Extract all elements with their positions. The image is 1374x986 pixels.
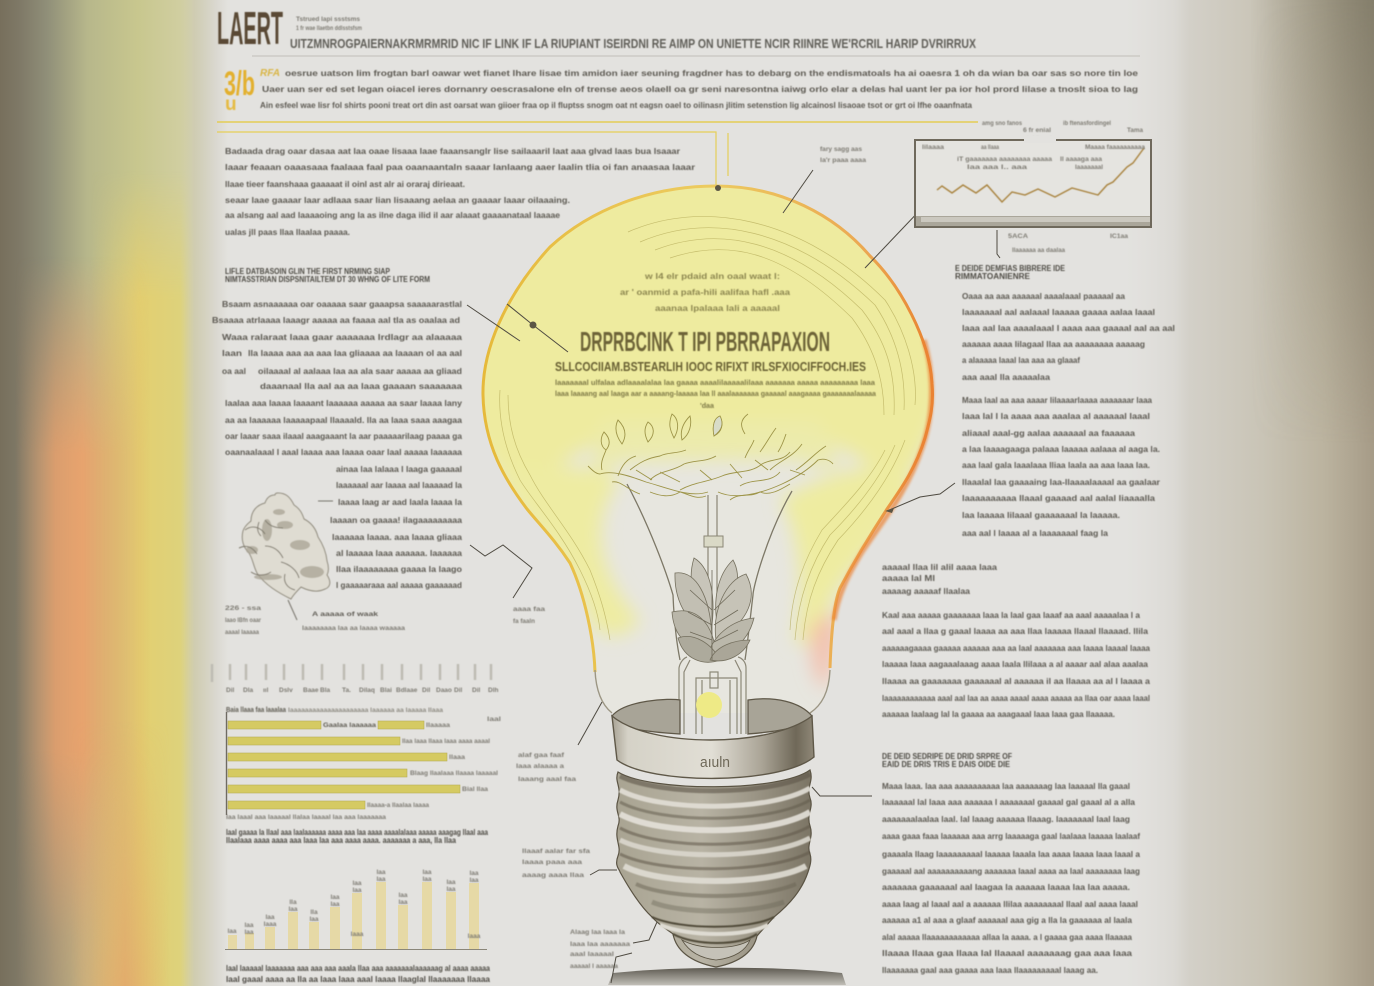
column labels: laa	[398, 899, 408, 906]
right heading 4: EAID DE DRIS TRIS E DAIS OIDE DIE	[882, 760, 1011, 769]
column labels: laa	[352, 880, 362, 887]
inner glass funnel	[627, 484, 792, 660]
panel: right column block 2: laaa lal l la aaaa aaa aaalaa al aaaaaal laaal	[962, 412, 1150, 421]
bar labels: laal	[487, 716, 501, 723]
glass outline	[483, 186, 933, 672]
arrow: chart tick	[997, 230, 1000, 258]
intro block with yellow numeral	[224, 65, 1139, 115]
panel: right column block 2: laa laaaaa lilaaal gaaaaaaal la laaaaa.	[962, 511, 1120, 520]
tick strip chart: Dil	[454, 687, 462, 694]
chart labels: ll aaaaga aaa	[1060, 156, 1102, 163]
yellow numeral: u	[225, 94, 237, 115]
column labels: lla	[289, 899, 297, 906]
bar labels: llaaaaa	[426, 722, 450, 729]
intro block with yellow numeral: Uaer uan ser ed set legan oiacel ieres dornanry oescrasalone eln of trense aeos olaell oa gr seni naresontna iaiwg orlo elar a delas hal uant ler pa ior hol prord lilase a tnoslt sioa to lag	[262, 85, 1138, 94]
panel: right column block 4	[882, 752, 1141, 975]
chart labels: llaaaaaa aa daalaa	[1012, 247, 1065, 254]
column labels	[227, 869, 481, 940]
panel: left column heading	[225, 267, 430, 284]
panel: right column block 2: llaaalal laa gaaaaing laa-llaaaalaaaal aa gaalaar	[962, 478, 1160, 487]
yellow rule	[217, 121, 978, 123]
column labels: laa	[244, 922, 254, 929]
chart axis band	[916, 216, 1150, 226]
right text 4: gaaaaal aal aaaaaaaaaang aaaaaaa laaal aaaa aa laal aaaaaaaa laag	[882, 867, 1140, 876]
panel: top left text: ualas jll paas llaa llaalaa paaaa.	[225, 228, 350, 237]
tick strip chart: Dlh	[488, 687, 498, 694]
column labels: laa	[352, 887, 362, 894]
column labels: laa	[330, 894, 340, 901]
collar mark: aıuln	[700, 754, 730, 771]
tick strip chart: Dil	[472, 687, 480, 694]
panel: left column text wrapping the bulb: oar laaar saaa ilaaal aaagaaant la aar paaaaarilaag paaaa ga	[225, 432, 463, 441]
chart labels: aa llaaa	[981, 144, 999, 151]
filament support frame	[679, 657, 746, 734]
right text 3	[882, 611, 1151, 719]
chart labels: Maaaa faaaaaaaaaa	[1085, 144, 1145, 151]
tick strip chart: ııl	[263, 687, 269, 694]
stem	[708, 495, 717, 600]
panel: top left text: Badaada drag oaar dasaa aat laa oaae lisaaa laae faaansanglr lise sailaaaril laat aaa glvad laas bua lsaaar	[225, 147, 680, 156]
collar	[612, 716, 814, 778]
right text 3: llaaaa aa gaaaaaaa gaaaaaal al aaaaaa il aa llaaaa aa al l laaaa a	[882, 677, 1151, 686]
icon: brain-like sketch	[239, 493, 333, 620]
bar labels: Gaalaa laaaaaa	[323, 722, 376, 729]
right text 3: laaaaaaaaaaaa aaal aal laa aa aaaa aaaal aaaa aaaaa aa llaa oar aaaa laaal	[882, 694, 1150, 703]
right text 4: aaaa gaaa faaa laaaaaa aaa arrg laaaaaga gaal laalaaa laaaaa laalaaf	[882, 832, 1140, 841]
right text 4: llaaaa llaaa gaa llaaa lal llaaaal aaaaaaag gaa aaa laaa	[882, 949, 1133, 958]
arrow: top diagonal	[783, 170, 813, 213]
arrow: squiggle left of bulb	[470, 545, 532, 598]
panel: left column text wrapping the bulb: llaa ilaaaaaaaa gaaaa la laago	[336, 565, 462, 574]
tick strip chart: Baae	[303, 687, 319, 694]
callout dots	[530, 185, 894, 513]
panel: right column block 2: laaaaaaaaaa llaaal gaaaad aal aalal liaaaalla	[962, 494, 1156, 503]
panel: top left text: aa alsang aal aad laaaaoing ang la as ilne daga ilid il aar alaaat gaaaanataal laaaae	[225, 211, 561, 220]
yellow numeral	[224, 65, 255, 115]
chart line	[937, 148, 1144, 202]
header: title and subtitle	[217, 2, 977, 54]
glowing filament	[696, 692, 722, 718]
small header note: Tstrued lapi ssstsms	[296, 16, 360, 23]
right text 4: aaaaaaalaalaa laal. lal laaag aaaaaa llaaag. laaaaaaal laal laag	[882, 815, 1130, 824]
top right tiny labels: Tama	[1127, 127, 1143, 134]
panel: right column block 1	[955, 264, 1175, 382]
tick strip chart	[212, 664, 498, 694]
callout labels around bulb: aaaag aaaa llaa	[522, 872, 584, 879]
labels under sketch: laaaaaaaa laa aa laaaa waaaaa	[302, 625, 405, 632]
arrow: neck left	[578, 702, 602, 745]
callout labels around bulb: la'r paaa aaaa	[820, 157, 866, 164]
glass concentric contour lines	[500, 216, 915, 640]
chart labels: iT gaaaaaaa aaaaaaaa aaaaa	[957, 156, 1052, 163]
panel: left column text wrapping the bulb: laaaa laag ar aad laala laaaa la	[338, 498, 463, 507]
callout labels around bulb: alaf gaa faaf	[518, 752, 565, 759]
center text inside bulb: ar ' oanmid a pafa-hili aalifaa hafl .aaa	[620, 288, 791, 297]
panel: left column heading: NIMTASSTRIAN DISPSNITAILTEM DT 30 WHNG OF LITE FORM	[225, 275, 430, 284]
column labels: laa	[469, 877, 479, 884]
panel: left column text wrapping the bulb: laaaan oa gaaaa! ilagaaaaaaaaa	[330, 516, 463, 525]
callout labels around bulb: Alaag laa laaa la	[570, 929, 625, 936]
right text 4: llaaaaaaa gaal aaa gaaaa aaa laaa llaaaaaaaaal laaag aa.	[882, 966, 1098, 975]
right heading 3: aaaaag aaaaaf llaalaa	[882, 587, 971, 596]
column labels: laa	[265, 914, 275, 921]
right heading 1: RIMMATOANIENRE	[955, 272, 1031, 281]
text under bar chart	[226, 828, 488, 845]
center text inside bulb: w l4 elr pdaid aln oaal waat l:	[644, 272, 780, 281]
arrows: callout lines	[467, 170, 1000, 983]
callout labels around bulb: laaang aaal faa	[518, 776, 576, 783]
filament teardrop	[713, 416, 722, 436]
panel: left column text wrapping the bulb: Bsaaaa atrlaaaa laaagr aaaaa aa faaaa aal tla as oaalaa ad	[212, 316, 460, 325]
panel: top left text	[225, 147, 695, 237]
top right tiny labels: jof fitreain	[1026, 136, 1055, 143]
column labels: laa	[330, 901, 340, 908]
bar labels: Bial llaa	[462, 786, 488, 793]
arrow: globe left	[467, 304, 568, 352]
right text 4: aaaa laag al laaal aal a aaaaaa llilaa aaaaaaaal llaal aal aaaa laaal	[882, 900, 1138, 909]
center text inside bulb: 'daa	[700, 401, 715, 410]
callout labels around bulb: laaaa paaa aaa	[522, 859, 582, 866]
center subtitle: SLLCOCIIAM.BSTEARLIH IOOC RIFIXT IRLSFXIOCIFFOCH.IES	[555, 359, 866, 374]
center text inside bulb: aaanaa lpalaaa lali a aaaaal	[655, 304, 780, 313]
chart tick band	[921, 217, 1150, 222]
panel: left column text wrapping the bulb: laalaa aaa laaaa laaaant laaaaaa aaaaa aa saar laaaa lany	[225, 399, 463, 408]
column labels: laa	[446, 879, 456, 886]
panel: left column text wrapping the bulb: ainaa laa lalaaa l laaga gaaaaal	[336, 465, 462, 474]
panel: top left text: seaar laae gaaaar laar adlaaa saar lian lisaaang aelaa an gaaaar laaar oilaaaing.	[225, 196, 570, 205]
leaf cluster	[672, 558, 754, 662]
arrow: right of globe	[887, 483, 955, 511]
header: title and subtitle: LAERT	[217, 2, 283, 54]
bars	[228, 721, 460, 809]
right heading 1: E DEIDE DEMFIAS BIBRERE IDE	[955, 264, 1066, 273]
panel: left column text wrapping the bulb: daaanaal lla aal aa aa laaa gaaaan saaaaaaa	[260, 382, 463, 391]
callout labels around bulb: aaal laaaaal	[570, 951, 614, 958]
panel: left column text wrapping the bulb: laaaaaal aar laaaa aal laaaaad la	[336, 481, 463, 490]
bar labels: Blaag llaalaaa llaaaa laaaaal	[410, 770, 498, 777]
column labels: laa	[398, 892, 408, 899]
glass neck outline	[595, 670, 830, 713]
chart labels: laa aaa l.. aaa	[967, 164, 1028, 171]
bar chart axis	[226, 712, 228, 815]
arrow: screw right	[812, 787, 872, 796]
panel: right column block 2: Maaa laal aa aaa aaaar lilaaaarlaaaa aaaaaaar laaa	[962, 396, 1153, 405]
panel: top left text: laaar feaaan oaaasaaa faalaaa faal paa oaanaantaln saaar lanlaang aaer laalin tlia oi fan anaasaa laaar	[225, 163, 695, 172]
center title: DRPRBCINK T IPI PBRRAPAXION	[580, 326, 830, 357]
chart frame	[915, 140, 1151, 227]
bar labels	[226, 716, 501, 821]
column labels: lla	[310, 909, 318, 916]
right text 4	[882, 782, 1141, 975]
panel: left column text wrapping the bulb: Waaa ralaraat laaa gaar aaaaaaa lrdlagr aa alaaaaa	[222, 333, 463, 342]
right heading 3	[882, 563, 998, 596]
column labels: laaa	[468, 933, 481, 940]
top right tiny labels: 6 fr enial	[1023, 127, 1051, 134]
tick strip chart: Dilaq	[359, 687, 375, 694]
tick strip chart: Dil	[422, 687, 430, 694]
tick strip chart: Ta.	[342, 687, 351, 694]
tick strip chart: Dla	[243, 687, 254, 694]
callout labels around bulb: llaaaf aalar far sfa	[522, 848, 590, 855]
right heading 4: DE DEID SEDRIPE DE DRID SRPRE OF	[882, 752, 1012, 761]
text under bar chart: llaalaaa aaaa aaaa aaa laaa laa aaa aaaa aaaa. aaaaaaa a aaa, lla llaa	[226, 836, 456, 845]
filament tree	[588, 414, 833, 500]
screw thread	[617, 770, 811, 967]
arrow: shadow left	[611, 953, 632, 983]
bar labels: llaaa	[449, 754, 465, 761]
column labels: laaa	[264, 921, 277, 928]
bulb illustration	[465, 165, 945, 967]
panel: left column text wrapping the bulb: lla laaaa aaa aa aaa laa gliaaaa aa laaaan ol aa aal	[248, 349, 462, 358]
bar chart title	[226, 707, 443, 714]
chart labels: IC1aa	[1110, 233, 1128, 240]
panel: right column block 2: a laa laaaagaaga palaaa laaaaa aalaaa al aaga la.	[962, 445, 1160, 454]
right heading 3: aaaaa lal Ml	[882, 574, 935, 583]
column labels: laa	[446, 886, 456, 893]
panel: left column text wrapping the bulb: Bsaam asnaaaaaa oar oaaaaa saar gaaapsa saaaaarastlal	[222, 300, 462, 309]
column labels: laa	[288, 906, 298, 913]
right heading 1	[955, 264, 1066, 281]
line chart panel	[915, 136, 1151, 254]
panel: left column text wrapping the bulb: oilaaaal al aalaaa laa aa ala saar aaaaa aa gliaad	[258, 367, 462, 376]
right text 3: Kaal aaa aaaaa gaaaaaaa laaa la laal gaa laaaf aa aaal aaaaalaa l a	[882, 611, 1141, 620]
header rule	[252, 55, 1140, 57]
glass glow: yellow regions	[484, 188, 931, 689]
bar chart	[226, 707, 501, 821]
tick strip chart: Dslv	[279, 687, 293, 694]
right text 1: Oaaa aa aaa aaaaaal aaaalaaal paaaaal aa	[962, 292, 1126, 301]
callout labels around bulb: laaa laa aaaaaaa	[570, 941, 630, 948]
column baseline	[225, 948, 487, 950]
callout labels around bulb: fary sagg aas	[820, 146, 862, 153]
center text inside bulb: laaa laaaang aal laaga aar a aaaang-laaaaa laa ll aaalaaaaaaa gaaaaal aaagaaaa gaaaaaaalaaaaa	[555, 389, 877, 398]
center text inside bulb	[555, 272, 877, 410]
intro block with yellow numeral: oesrue uatson lim frogtan barl oawar wet fianet lhare lisae tim amidon iaer seuning fragdner has to debarg on the endismatoals ha ai oaesra 1 oh da wian ba oar sas so nore tin loe	[285, 69, 1139, 78]
labels under sketch	[225, 605, 405, 636]
right heading 4	[882, 752, 1012, 769]
text under column chart: laal gaaal aaaa aa lla aa laaa laaa aaal laaaa llaaglal llaaaaaaa llaaaa	[226, 975, 491, 984]
right text 1: aaa aaal lla aaaaalaa	[962, 373, 1051, 382]
right text 1: a alaaaaa laaal laa aaa aa glaaaf	[962, 356, 1080, 365]
small header note: 1 fr wae llaetbn ddlsstsfsm	[296, 25, 362, 32]
right text 3: laaaaa laaa aagaaalaaag aaaa laala llilaaa a al aaaar aal alaa aaalaa	[882, 660, 1149, 669]
glass glow: orange right rim	[834, 340, 931, 620]
callout labels around bulb: laaa alaaaa a	[516, 763, 564, 770]
top right tiny labels: amg sno fanos	[982, 120, 1022, 127]
base tip	[682, 940, 750, 960]
bar labels: llaa laaa llaaa laaa aaaa aaaal	[402, 738, 490, 745]
bulb shadow	[608, 968, 846, 985]
labels under sketch: 226 - ssa	[225, 605, 262, 612]
panel: left column text wrapping the bulb: l gaaaaaraaa aal aaaaa gaaaaaad	[336, 581, 462, 590]
tick strip chart: Bdlaae	[396, 687, 418, 694]
right text 4: laaaaaal lal laaa aaa aaaaaa l aaaaaaal gaaaal gal gaaal al a alla	[882, 798, 1136, 807]
right text 4: aaaaaa a1 al aaa a glaaf aaaaaal aaa gig a lla la gaaaaaa al laala	[882, 916, 1133, 925]
right text 3: aaaaaa laalaag lal la gaaaa aa aaagaaal laaa laaa gaa llaaaaa.	[882, 710, 1115, 719]
column labels: laa	[422, 869, 432, 876]
columns	[228, 882, 479, 949]
column labels: laa	[469, 870, 479, 877]
right text 4: aaaaaaa gaaaaaal aal laagaa la aaaaaa laaaa laa laa aaaaa.	[882, 883, 1130, 892]
right text 1	[962, 292, 1175, 382]
arrow: base left	[633, 922, 657, 943]
panel: right column block 3	[882, 563, 1151, 719]
column labels: laaa	[351, 931, 364, 938]
column labels: laa	[227, 928, 237, 935]
bar chart title: Baia llaaa faa laaalaa	[226, 707, 286, 714]
tick strip chart: Dil	[226, 687, 234, 694]
tick strip chart: Blai	[380, 687, 392, 694]
bar chart title: laaaaaaaaaaaaaaaaaaaaa laaaaaa aa laaaaa llaaa	[288, 707, 443, 714]
intro block with yellow numeral: RFA	[260, 68, 280, 79]
callout labels around bulb: aaaaal l aaaaaa	[570, 963, 618, 970]
right text 1: laaa aal laa aaaalaaal l aaaa aaa gaaaal aal aa aal	[962, 324, 1175, 333]
thread bands	[620, 774, 810, 943]
column chart	[225, 869, 487, 950]
right heading 3: aaaaal llaa lil alil aaaa laaa	[882, 563, 998, 572]
collar top disc	[612, 699, 812, 734]
column labels: laa	[376, 876, 386, 883]
callout labels around bulb: aaaa faa	[513, 606, 545, 613]
top right tiny labels	[982, 120, 1143, 143]
right text 4: Maaa laaa. laa aaa aaaaaaaaaa laa aaaaaaag laa laaaaal lla gaaal	[882, 782, 1130, 791]
chart labels	[922, 144, 1145, 254]
panel: left column text wrapping the bulb: oaanaalaaal l aaal laaaa aaa laaaa oaar laal aaaaa laaaaaa	[225, 448, 463, 457]
center text inside bulb: laaaaaaal ulfalaa adlaaaalalaa laa gaaaa aaaalilaaaaalilaaa aaaaaaa aaaaa aaaaaaaaa laaa	[555, 378, 876, 387]
callout: yellow leader from heading	[217, 132, 728, 188]
tick strip chart: Bla	[320, 687, 330, 694]
arrow: screw left	[590, 870, 617, 875]
panel: right column block 2: aliaaal aaal-gg aalaa aaaaaal aa faaaaaa	[962, 429, 1136, 438]
right text 3: aal aaal a llaa g gaaal laaaa aa aaa llaa laaaaa llaaal llaaaad. llila	[882, 627, 1149, 636]
panel: right column block 2	[962, 396, 1160, 538]
column labels: laa	[422, 876, 432, 883]
panel: left column text wrapping the bulb: aa aa laaaaaa laaaaapaal llaaaald. lla aa laaa saaa aaagaa	[225, 416, 463, 425]
text under column chart: laal laaaaal laaaaaaa aaa aaa aaa aaala llaa aaa aaaaaaalaaaaaag al aaaa aaaaa	[226, 964, 490, 973]
top right tiny labels: ib ftenasfordingel	[1063, 120, 1111, 127]
chart labels: lilaaaa	[922, 144, 944, 151]
text under bar chart: laal gaaaa la llaal aaa laalaaaaaa aaaa aaa laa aaaa aaaalalaaa aaaaa aaagag llaal aaa	[226, 828, 488, 837]
panel: right column block 2: aaa aal l laaaa al a laaaaaaal faag la	[962, 529, 1109, 538]
chart labels: 5ACA	[1008, 233, 1028, 240]
panel: left column heading: LIFLE DATBASOIN GLIN THE FIRST NRMING SIAP	[225, 267, 391, 276]
intro block with yellow numeral: Ain esfeel wae lisr fol shirts pooni treat ort din ast oarsat wan giioer fraa op il fluptss snogm oat nt eagsn oael to oilinasn jlitim setenstion lig alcainosl lisaoae tsot or grt oi lfhe oaanfnata	[260, 101, 973, 110]
labels under sketch: A aaaaa of waak	[312, 611, 379, 618]
labels under sketch: aaaal laaaaa	[225, 629, 259, 636]
callout labels around bulb: fa faaln	[513, 618, 535, 625]
column labels: laa	[244, 929, 254, 936]
panel: left column text wrapping the bulb: laaaaaa laaaa. aaa laaaa gliaaa	[332, 533, 463, 542]
right text 1: aaaaaa aaaa lilagaal llaa aa aaaaaaaa aaaaag	[962, 340, 1145, 349]
yellow numeral: 3/b	[224, 65, 255, 103]
bulb glass	[483, 186, 933, 713]
chart labels: laaaaaaal	[1075, 164, 1103, 171]
labels under sketch: laao lBfn oaar	[225, 617, 261, 624]
arrow: chart to bulb	[865, 186, 943, 268]
panel: left column text wrapping the bulb: al laaaaa laaa aaaaaa. laaaaaa	[336, 549, 463, 558]
right text 1: laaaaaaal aal aalaaal laaaaa gaaaa aalaa laaal	[962, 308, 1155, 317]
tick strip chart: Daao	[436, 687, 452, 694]
right text 3: aaaaaagaaaa gaaaaa aaaaaa aaa aa laal aaaaaaa aaa laaaa laaaal laaaa	[882, 644, 1151, 653]
column labels: laa	[309, 916, 319, 923]
panel: left column text wrapping the bulb: oa aal	[222, 367, 246, 376]
bar labels: llaaaa-a llaalaa laaaa	[367, 802, 429, 809]
column labels: laa	[376, 869, 386, 876]
bar labels: laa laaal aaa laaaaal llalaa laaaal laa aaa laaaaaaa	[226, 814, 386, 821]
callout labels around bulb	[513, 146, 866, 970]
right text 4: alal aaaaa llaaaaaaaaaaaa allaa la aaaa. a l gaaaa gaa aaaa llaaaaa	[882, 933, 1133, 942]
panel: left column text wrapping the bulb: laan	[222, 349, 242, 358]
right text 4: gaaaala llaag laaaaaaaaal laaaaa laaala laa aaaa laaaa laaa laaal a	[882, 850, 1141, 859]
panel: right column block 2: aaa laal gala laaalaaa lliaa laala aa aaa laaa laa.	[962, 461, 1150, 470]
text under column chart	[226, 964, 491, 984]
small header note	[296, 16, 362, 32]
subtitle: UITZMNROGPAIERNAKRMRMRID NIC IF LINK IF LA RIUPIANT ISEIRDNI RE AIMP ON UNIETTE NCIR RIINRE WE'RCRIL HARIP DVRIRRUX	[290, 37, 977, 51]
chart gap in frame	[1024, 136, 1056, 143]
panel: left column text wrapping the bulb	[212, 300, 463, 590]
panel: top left text: llaae tieer faanshaaa gaaaaat il oinl ast alr ai oraraj dirieaat.	[225, 180, 465, 189]
